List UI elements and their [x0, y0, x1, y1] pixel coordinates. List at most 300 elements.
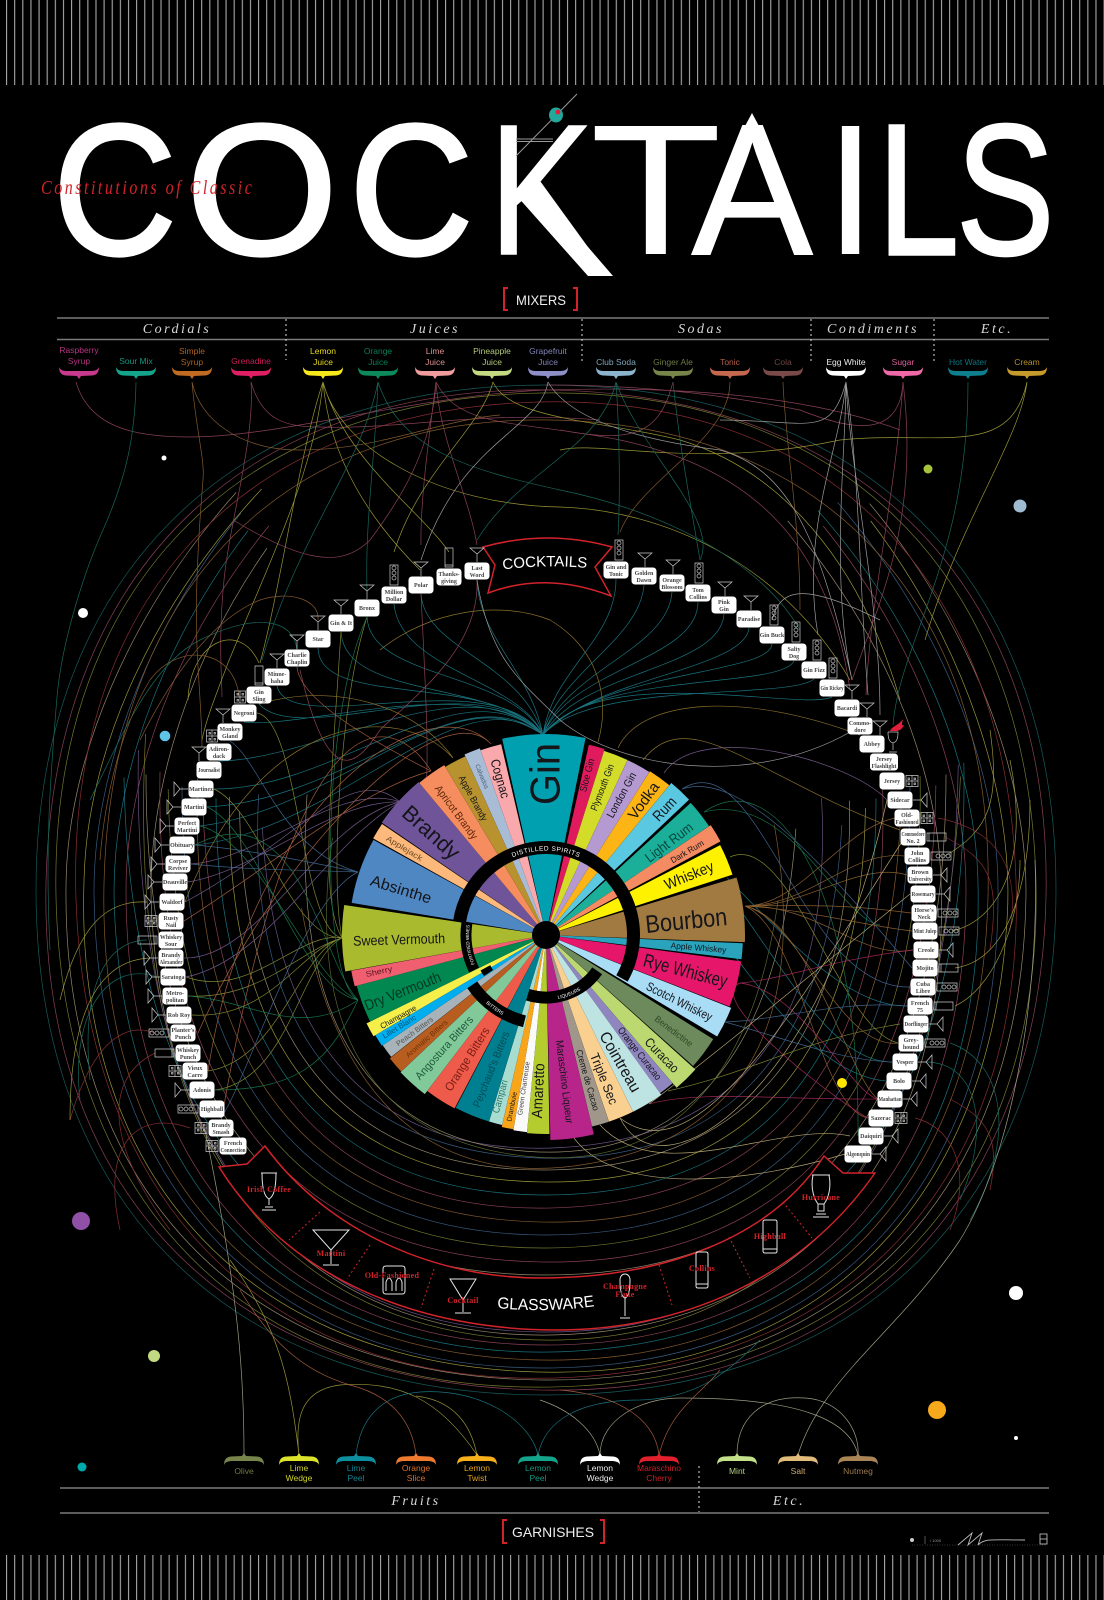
- header: GARNISHES: [503, 1520, 604, 1543]
- cocktail: Polar: [408, 562, 434, 594]
- cocktail: Cuba Libre: Libre: [916, 989, 930, 995]
- cocktail: Pink Gin: [712, 582, 736, 614]
- segment: Creme de Cacao: Creme de Cacao: [574, 1048, 601, 1112]
- segment: Campari: [429, 818, 663, 1115]
- segment: Sweet Vermouth: [353, 816, 665, 1054]
- mixer: Lemon Juice: [303, 346, 343, 379]
- garnish: Nutmeg: Nutmeg: [843, 1466, 873, 1476]
- cocktail: Gin Buck: [760, 605, 785, 644]
- ring: distilled spirits: [453, 841, 640, 982]
- cocktail: Jersey: Jersey: [884, 779, 900, 785]
- segment: Sherry: [365, 814, 667, 1056]
- ring: bitters: [467, 982, 526, 1028]
- cocktail: Charlie Chaplin: [284, 635, 310, 666]
- segment: Angostura Bitters: [406, 795, 686, 1083]
- segment: London Gin: London Gin: [605, 771, 639, 820]
- garnishes row: [224, 1453, 878, 1483]
- mixer: Orange Juice: Juice: [368, 357, 388, 367]
- segment: Whiskey: [414, 803, 717, 1067]
- mixer: Hot Water: Hot Water: [949, 357, 987, 367]
- cocktail: Mint Julep: [912, 922, 959, 940]
- cocktail: Gin & It: Gin & It: [330, 621, 352, 627]
- cocktail: Vieux Carre: [169, 1062, 208, 1080]
- segment: Apple Whiskey: Apple Whiskey: [670, 940, 728, 955]
- garnish: Orange Slice: [396, 1453, 436, 1483]
- mixer: Club Soda: [596, 357, 636, 379]
- segment: London Gin: [418, 771, 674, 1063]
- cocktail: Orange Blossom: Blossom: [661, 585, 683, 591]
- cocktail: Vieux Carre: Carre: [187, 1073, 203, 1079]
- cocktail: Daiquiri: [858, 1128, 898, 1144]
- garnish: Lemon Peel: Lemon: [525, 1463, 551, 1473]
- title: COCKTAILS: L: [878, 87, 959, 294]
- cocktail: Horse's Neck: Horse's: [914, 908, 934, 914]
- segment: Triple Sec: Triple Sec: [587, 1051, 621, 1107]
- cocktail: Metropolitan: politan: [166, 998, 185, 1004]
- cocktail: Perfect Martini: Martini: [177, 828, 197, 834]
- cocktail: Planter's Punch: [149, 1024, 196, 1042]
- segment: Amaretto: Amaretto: [529, 1063, 548, 1119]
- cocktail: Negroni: [232, 691, 256, 722]
- cocktail: French 75: French: [911, 1001, 930, 1007]
- cocktail: Corpse Reviver: Reviver: [168, 866, 188, 872]
- cocktail: Charlie Chaplin: Charlie: [287, 653, 307, 659]
- mixer: Cream: Cream: [1014, 357, 1040, 367]
- segment: Cognac: [421, 757, 671, 1060]
- garnish: Olive: Olive: [234, 1466, 254, 1476]
- cocktail: Paradise: Paradise: [738, 617, 760, 623]
- mixer: Simple Syrup: [172, 346, 212, 379]
- cocktail: Adirondack: dack: [213, 754, 226, 760]
- garnish: Mint: Mint: [729, 1466, 746, 1476]
- garnish: Salt: Salt: [791, 1466, 806, 1476]
- icon: martini in the K: [516, 94, 577, 156]
- glass: Champagne Flute: [603, 1274, 647, 1318]
- mixer: Sugar: [883, 357, 923, 379]
- cocktail: Bronx: Bronx: [359, 606, 375, 612]
- cocktail: Perfect Martini: Perfect: [178, 821, 196, 827]
- cocktail: Sidecar: [888, 792, 927, 808]
- title: COCKTAILS: C: [350, 85, 473, 294]
- glass: Cocktail: [447, 1279, 479, 1313]
- cocktail: Gin Rickey: Gin Rickey: [820, 686, 844, 692]
- cocktail: Star: [306, 616, 330, 648]
- segment: Scotch Whiskey: [417, 806, 715, 1064]
- mixer: Orange Juice: Orange: [364, 346, 392, 356]
- ring: liqueurs: [526, 967, 602, 1004]
- mixer category band: Sodas: [678, 322, 724, 337]
- garnish: Lemon Twist: Lemon: [464, 1463, 490, 1473]
- garnish lines: [205, 860, 1036, 1455]
- cocktail: Rob Roy: [152, 1006, 192, 1024]
- segment: Campari: Campari: [491, 1079, 511, 1115]
- segment: Lillet Blanc: [381, 798, 683, 1072]
- segment: Peach Bitters: Peach Bitters: [394, 1015, 435, 1048]
- cocktail: Rosemary: [910, 886, 950, 902]
- cocktail: John Collins: [904, 848, 951, 864]
- cocktail: Sidecar: Sidecar: [890, 798, 910, 804]
- mixer category band: Condiments: [827, 322, 919, 337]
- segment: Calvados: [415, 763, 677, 1066]
- garnish category band: [60, 1466, 1049, 1513]
- segment: Scotch Whiskey: Scotch Whiskey: [644, 979, 715, 1024]
- cocktail: Salty Dog: Salty: [787, 647, 801, 653]
- title: COCKTAILS: O: [186, 86, 338, 294]
- segment: Plymouth Gin: Plymouth Gin: [589, 763, 617, 813]
- cocktail: Charlie Chaplin: Chaplin: [287, 660, 308, 666]
- segment: Amaretto: [445, 834, 647, 1119]
- cocktail: Whiskey Sour: Sour: [165, 942, 178, 948]
- cocktail: Gin and Tonic: [604, 540, 628, 578]
- cocktail: Jersey Flashlight: Jersey: [876, 757, 892, 763]
- garnish: Lemon Twist: [457, 1453, 497, 1483]
- cocktail: Greyhound: [898, 1034, 945, 1052]
- cocktail: Sazerac: [868, 1110, 907, 1126]
- segment: Drambuie: Drambuie: [506, 1091, 519, 1122]
- cocktail: Monkey Gland: [216, 709, 242, 740]
- glass: Martini: Martini: [317, 1249, 346, 1258]
- garnish: Maraschino Cherry: [637, 1453, 681, 1483]
- segment: Apple Whiskey: [443, 832, 728, 1038]
- mixer lines, brown and cream: [100, 382, 800, 860]
- cocktail: Gin Sling: Sling: [252, 697, 266, 703]
- segment: Orange Curacao: [409, 798, 683, 1083]
- cocktail: Gin Rickey: [820, 658, 844, 696]
- cocktail: French Connection: [206, 1138, 246, 1154]
- segment: Sherry: Sherry: [365, 964, 393, 979]
- cocktail: Brown University: Brown: [911, 870, 929, 876]
- cocktail: Star: Star: [312, 637, 324, 643]
- wheel lines to right column: [745, 818, 913, 1118]
- segment: Maraschino Liqueur: [422, 811, 670, 1125]
- cocktail: Martini: Martini: [184, 805, 204, 811]
- cocktail: Adirondack: [206, 730, 232, 760]
- title: COCKTAILS: C: [53, 85, 177, 294]
- segment: Peychaud's Bitters: Peychaud's Bitters: [471, 1030, 512, 1109]
- cocktail: Bolo: Bolo: [893, 1079, 905, 1085]
- segment: Rum: [407, 794, 685, 1074]
- header: GARNISHES: GARNISHES: [512, 1524, 594, 1540]
- mixer: Sugar: Sugar: [892, 357, 915, 367]
- cocktail: Mint Julep: Mint Julep: [914, 929, 937, 935]
- cocktail: Waldorf: Waldorf: [161, 900, 184, 906]
- garnish: Lime Wedge: Lime: [290, 1463, 308, 1473]
- garnish: Lemon Wedge: Lemon: [587, 1463, 613, 1473]
- mixer: Sour Mix: [116, 356, 156, 379]
- segment: Cointreau: [408, 797, 684, 1096]
- cocktail: Corpse Reviver: [151, 856, 190, 872]
- cocktail: Planter's Punch: Planter's: [172, 1028, 195, 1034]
- cocktail: Adonis: Adonis: [193, 1088, 212, 1094]
- title: COCKTAILS: [53, 85, 1054, 294]
- cocktail: Million Dollar: Million: [385, 590, 404, 596]
- garnish: Lime Wedge: [279, 1453, 319, 1483]
- mixer category band: Etc.: [980, 322, 1013, 337]
- cocktail: Jersey: [880, 772, 918, 790]
- mixer: Raspberry Syrup: [59, 345, 99, 379]
- cocktail: Greyhound: hound: [903, 1045, 920, 1051]
- garnish: Olive: [224, 1453, 264, 1476]
- cocktail: Pink Gin: Pink: [718, 600, 731, 606]
- cocktail: Metropolitan: Metro-: [166, 991, 184, 997]
- cocktail: Cuba Libre: Cuba: [916, 982, 930, 988]
- footer: signature and edition mark: [910, 1533, 1047, 1545]
- cocktail: Brandy Smash: Brandy: [211, 1123, 231, 1129]
- header: MIXERS: MIXERS: [516, 292, 566, 308]
- cocktail: Adonis: [175, 1082, 214, 1098]
- cocktails arc: [138, 540, 959, 1162]
- segment: Aromatic Bitters: Aromatic Bitters: [405, 1019, 450, 1059]
- mixer: Hot Water: [948, 357, 988, 379]
- mixer: Lime Juice: Juice: [425, 357, 445, 367]
- segment: Brandy: [397, 797, 684, 1073]
- cocktail: Old-Fashioned: Fashioned: [896, 820, 919, 826]
- mixer: Lime Juice: [415, 346, 455, 379]
- glass: Martini: [313, 1230, 349, 1265]
- cocktail: Thanksgiving: [436, 548, 462, 586]
- cocktail: Thanksgiving: giving: [441, 579, 457, 585]
- garnish: Lemon Wedge: [580, 1453, 620, 1483]
- cocktail: Brandy Alexander: Brandy: [161, 953, 181, 959]
- title: COCKTAILS: S: [956, 85, 1054, 294]
- cocktail: Bronx: [354, 585, 380, 616]
- segment: Benedictine: Benedictine: [653, 1014, 695, 1049]
- cocktail: Martini: [167, 798, 206, 816]
- ring: liqueurs: LIQUEURS: [558, 988, 580, 999]
- segment: Curacao: Curacao: [642, 1034, 682, 1076]
- mixer: Pineapple Juice: Pineapple: [473, 346, 511, 356]
- mixer: Ginger Ale: [653, 357, 693, 379]
- mixer lines, teal and green: [48, 382, 968, 950]
- cocktail: Martinez: [174, 780, 214, 798]
- side icon wraparound lines: [70, 818, 1012, 1230]
- cocktail: Creole: Creole: [918, 948, 935, 954]
- title: COCKTAILS: T: [590, 86, 722, 294]
- banner: GLASSWARE: [218, 1144, 876, 1331]
- mixer: Tonic: Tonic: [720, 357, 741, 367]
- cocktail: Bacardi: Bacardi: [837, 706, 857, 712]
- cocktail: Salty Dog: Dog: [789, 654, 799, 660]
- cocktail: Vesper: Vesper: [896, 1060, 914, 1066]
- mixer: Egg White: [826, 357, 866, 379]
- segment: Gin: Gin: [522, 743, 568, 805]
- segment: Absinthe: [368, 822, 659, 1048]
- garnish: Lemon Twist: Twist: [467, 1473, 487, 1483]
- cocktail: John Collins: Collins: [908, 858, 927, 864]
- mixer lines, rose: [76, 382, 907, 800]
- segment: Aromatic Bitters: [405, 794, 687, 1076]
- cocktail: Rob Roy: Rob Roy: [168, 1013, 190, 1019]
- cocktail: Tom Collins: Collins: [689, 595, 708, 601]
- segment: Champagne: Champagne: [379, 1003, 418, 1031]
- banner: GLASSWARE: GLASSWARE: [498, 1295, 594, 1310]
- title: COCKTAILS: I: [825, 87, 876, 294]
- mixer: Sour Mix: Sour Mix: [119, 356, 154, 366]
- mixer: Grapefruit Juice: Grapefruit: [529, 346, 568, 356]
- wheel hub: [532, 921, 560, 949]
- segment: Vodka: [412, 779, 680, 1069]
- cocktail: Brandy Alexander: Alexander: [160, 960, 183, 966]
- segment: Apple Brandy: [412, 774, 680, 1069]
- glass: Champagne Flute: Champagne: [603, 1282, 647, 1291]
- cocktail: Deauville: [148, 874, 188, 890]
- cocktail: Minnehaha: haha: [271, 679, 283, 685]
- cocktail: Greyhound: Grey-: [904, 1038, 918, 1044]
- cocktail: Orange Blossom: Orange: [662, 578, 682, 584]
- glass: Hurricane: Hurricane: [802, 1193, 840, 1202]
- mixer: Cola: [763, 357, 803, 379]
- segment: Vodka: Vodka: [625, 779, 664, 823]
- cocktail: Monkey Gland: Gland: [222, 734, 239, 740]
- segment: Sloe Gin: Sloe Gin: [578, 758, 598, 793]
- gin fan: [195, 579, 907, 1081]
- cocktail: Gin Sling: Gin: [254, 690, 264, 696]
- cocktail: Golden Dawn: Golden: [635, 571, 654, 577]
- cocktail: Tom Collins: Tom: [692, 588, 704, 594]
- segment: Orange Curacao: Orange Curacao: [615, 1025, 663, 1083]
- glass: Collins: Collins: [689, 1264, 715, 1273]
- cocktail: Rusty Nail: Rusty: [163, 916, 179, 922]
- cocktail: Dorflinger: [904, 1016, 943, 1032]
- garnish: Orange Slice: Slice: [407, 1473, 425, 1483]
- segment: Dark Rum: Dark Rum: [669, 838, 706, 865]
- cocktail: Gin Sling: [246, 666, 272, 704]
- cocktail: Gin and Tonic: Tonic: [609, 572, 623, 578]
- segment: Curacao: [404, 793, 688, 1077]
- cocktail: John Collins: John: [911, 851, 924, 857]
- top stripes: [0, 0, 1104, 85]
- garnish: Lemon Peel: Peel: [529, 1473, 547, 1483]
- cocktail: Gin Fizz: Gin Fizz: [803, 668, 825, 674]
- segment: Plymouth Gin: [425, 763, 667, 1056]
- glass: Cocktail: Cocktail: [447, 1296, 479, 1305]
- mixer: Grapefruit Juice: [528, 346, 568, 379]
- segment: Green Chartreuse: Green Chartreuse: [517, 1061, 532, 1116]
- garnish: Maraschino Cherry: Cherry: [646, 1473, 672, 1483]
- cocktail: Commodore No. 2: Commodore: [902, 832, 925, 838]
- glass: Collins: [689, 1252, 715, 1288]
- ring: fortified wines: FORTIFIED WINES: [466, 925, 475, 965]
- segment: Creme de Cacao: [421, 810, 671, 1112]
- cocktail: French 75: [908, 998, 953, 1014]
- segment: Bourbon: Bourbon: [644, 903, 728, 939]
- segment: Brandy: Brandy: [397, 800, 465, 865]
- cocktail: Mojito: [912, 960, 958, 976]
- segment: Orange Bitters: [414, 803, 678, 1094]
- garnish category band: Fruits: [390, 1494, 441, 1509]
- mixer: Orange Juice: [358, 346, 398, 379]
- cocktail: Commodore: [848, 703, 874, 734]
- cocktail: Whiskey Sour: [138, 932, 184, 948]
- header: MIXERS: [504, 288, 577, 310]
- cocktail: Creole: [914, 942, 953, 958]
- mixer: Raspberry Syrup: Syrup: [68, 356, 90, 366]
- cocktail: Martinez: Martinez: [189, 787, 213, 793]
- segment: Sweet Vermouth: Sweet Vermouth: [353, 930, 445, 949]
- cocktail: Tom Collins: [686, 563, 710, 602]
- cocktail: French Connection: Connection: [220, 1148, 246, 1154]
- cocktail: Horse's Neck: [912, 904, 958, 922]
- segment: Apricot Brandy: Apricot Brandy: [432, 783, 480, 842]
- banner: COCKTAILS: [482, 537, 614, 598]
- segment: Bourbon: [422, 811, 728, 1059]
- segment: Apricot Brandy: [407, 783, 685, 1074]
- title: COCKTAILS: K: [488, 86, 594, 294]
- cocktail: Jersey Flashlight: [870, 719, 904, 770]
- mixer: Grenadine: Grenadine: [231, 356, 271, 366]
- cocktail: Brown University: [908, 866, 947, 884]
- cocktail: Minnehaha: Minne-: [268, 672, 286, 678]
- cocktail: Gin & It: [328, 600, 354, 632]
- decorative dots: [72, 456, 1026, 1472]
- cocktail: Golden Dawn: [632, 553, 656, 584]
- cocktail: Gin and Tonic: Gin and: [606, 565, 627, 571]
- mixer: Simple Syrup: Simple: [179, 346, 205, 356]
- garnish: Orange Slice: Orange: [402, 1463, 430, 1473]
- segment: Rye Whiskey: [435, 824, 730, 1046]
- subtitle: Constitutions of Classic: [41, 176, 254, 198]
- cocktail: Whiskey Punch: [155, 1044, 200, 1062]
- segment: Peychaud's Bitters: [424, 813, 668, 1109]
- cocktail: Rusty Nail: Nail: [166, 923, 177, 929]
- cocktail: Rusty Nail: [145, 912, 184, 930]
- segment: Orange Bitters: Orange Bitters: [442, 1025, 493, 1094]
- mixer lines, yellow: [188, 382, 1027, 740]
- segment: Dark Rum: [409, 798, 706, 1072]
- segment: Angostura Bitters: Angostura Bitters: [413, 1014, 476, 1083]
- cocktail: Thanksgiving: Thanks-: [438, 572, 460, 578]
- cocktail: Commodore No. 2: No. 2: [906, 839, 920, 845]
- segment: Apple Brandy: Apple Brandy: [456, 774, 489, 823]
- glass: Hurricane: [802, 1175, 840, 1217]
- cocktail: Mojito: Mojito: [916, 966, 934, 972]
- garnish category band: Etc.: [772, 1494, 805, 1509]
- cocktail: Whiskey Punch: Punch: [180, 1055, 197, 1061]
- cocktail: Old-Fashioned: [894, 810, 933, 826]
- connection lines network: [29, 373, 1063, 1455]
- cocktail: Polar: Polar: [414, 583, 428, 589]
- spirits wheel: [342, 734, 745, 1140]
- segment: Rum: Rum: [649, 794, 680, 825]
- wheel lines to left column: [186, 617, 900, 1091]
- cocktail: French Connection: French: [224, 1141, 243, 1147]
- segment: Rye Whiskey: Rye Whiskey: [641, 950, 730, 993]
- ring: wine: [450, 839, 642, 1031]
- title: COCKTAILS: A: [692, 85, 812, 294]
- ring: bitters: BITTERS: [486, 1001, 504, 1014]
- mixer: Tonic: [710, 357, 750, 379]
- cocktail: Last Word: [464, 548, 490, 580]
- banner: COCKTAILS: COCKTAILS: [503, 556, 587, 569]
- segment: Drambuie: [433, 822, 659, 1122]
- mixer category band: Juices: [410, 322, 460, 337]
- cocktail: Gin Buck: Gin Buck: [760, 633, 785, 639]
- ring: fortified wines: [460, 922, 479, 972]
- garnish: Lemon Wedge: Wedge: [587, 1473, 614, 1483]
- segment: Light Rum: [408, 797, 696, 1073]
- mixer: Ginger Ale: Ginger Ale: [653, 357, 693, 367]
- garnish: Lime Peel: Peel: [347, 1473, 365, 1483]
- segment: Sloe Gin: [429, 758, 663, 1052]
- cocktail: Old-Fashioned: Old-: [901, 813, 913, 819]
- mixer: Grenadine: [231, 356, 271, 379]
- segment: Absinthe: Absinthe: [368, 873, 433, 907]
- garnish: Lemon Peel: [518, 1453, 558, 1483]
- segment: Dry Vermouth: [362, 804, 677, 1066]
- garnish: Lime Wedge: Wedge: [286, 1473, 313, 1483]
- glass: Highball: [754, 1220, 787, 1253]
- cocktail: Bacardi: [834, 685, 860, 716]
